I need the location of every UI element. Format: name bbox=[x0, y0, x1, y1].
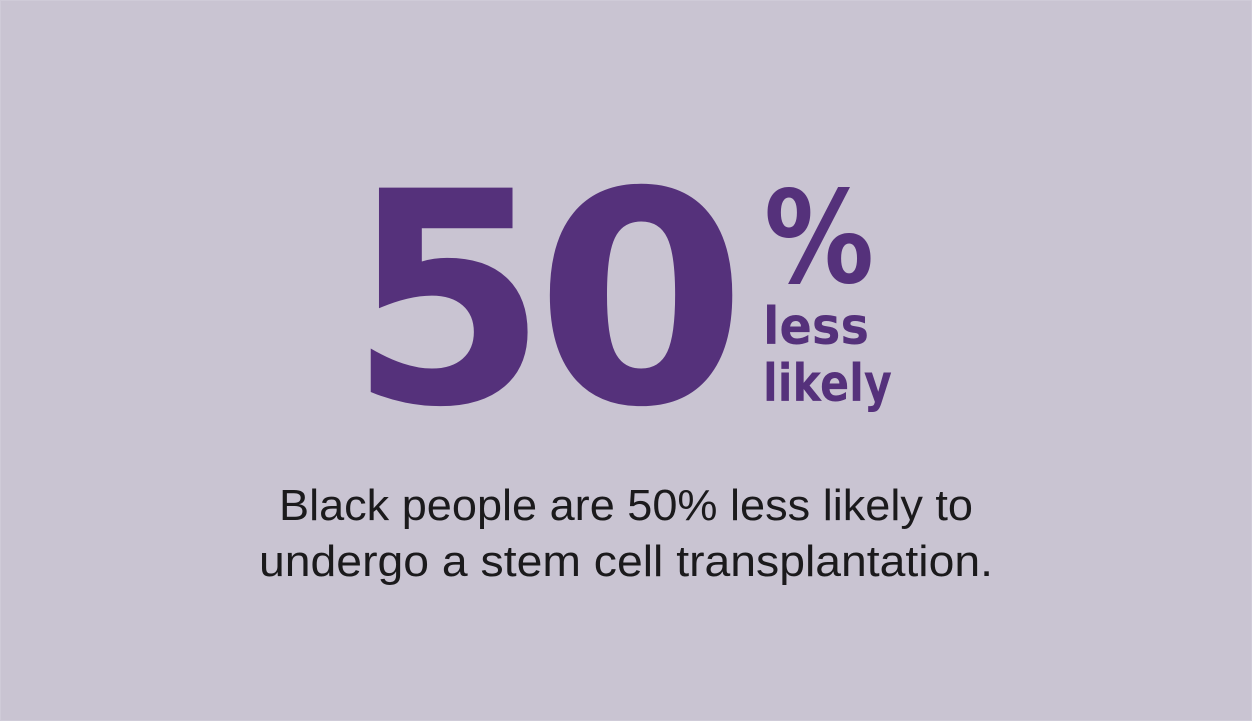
big number: 50: 5 bbox=[349, 130, 548, 472]
label: likely: likely bbox=[763, 354, 892, 414]
description text: undergo a stem cell transplantation. bbox=[259, 537, 993, 586]
percent sign: % bbox=[764, 164, 874, 313]
description text: Black people are 50% less likely to bbox=[279, 481, 973, 530]
description text bbox=[259, 481, 993, 586]
big number: 50: 0 bbox=[535, 129, 747, 472]
big number: 50 bbox=[349, 129, 747, 472]
label: less: less bbox=[763, 297, 869, 357]
